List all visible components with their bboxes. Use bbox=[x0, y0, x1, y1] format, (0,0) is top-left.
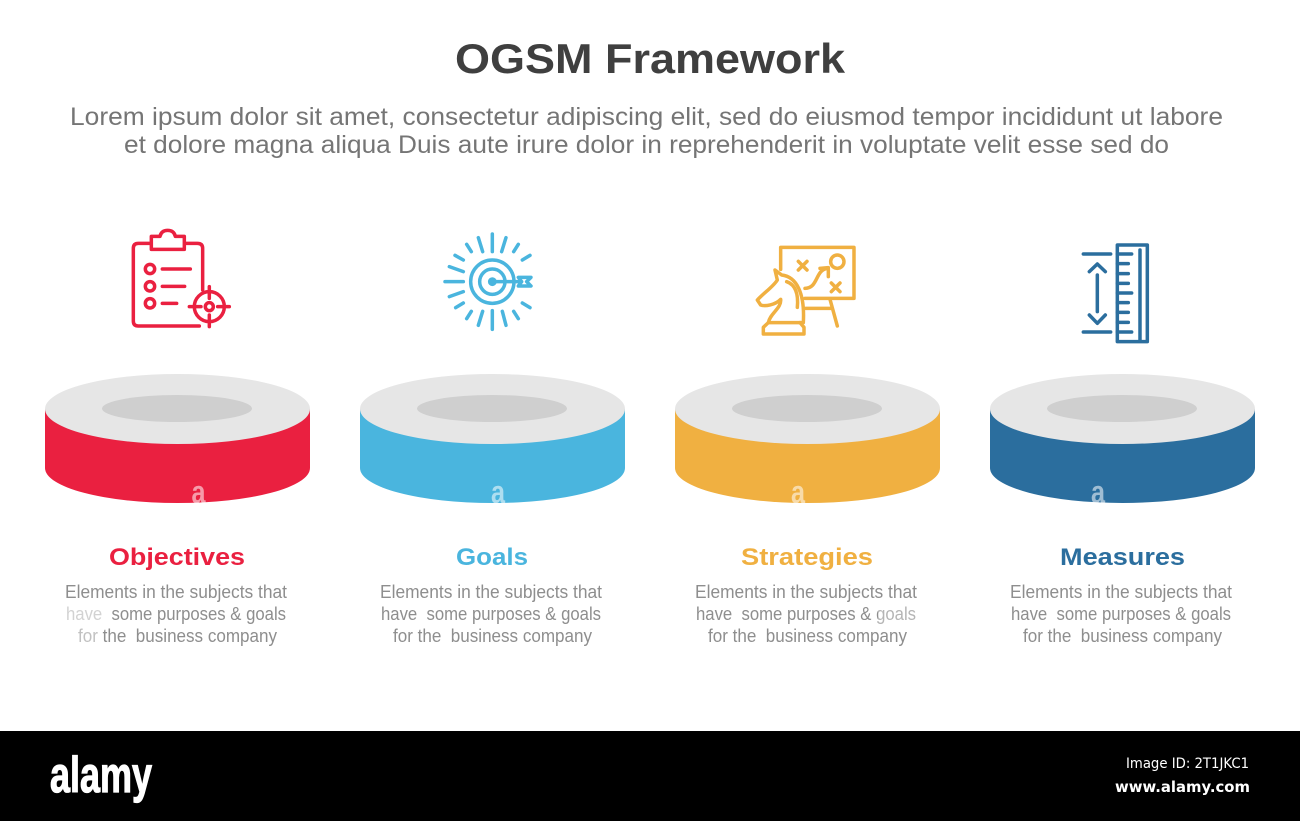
description: strategies bbox=[695, 582, 918, 646]
subtitle text block bbox=[70, 103, 1223, 159]
description: goals bbox=[380, 582, 602, 646]
panel: goals bbox=[360, 234, 625, 646]
description: strategies: have some purposes & goals bbox=[696, 604, 916, 624]
panel: objectives bbox=[45, 230, 310, 647]
cylinder: yellow: a bbox=[791, 474, 805, 510]
heading: measures: Measures bbox=[1060, 544, 1185, 571]
description: objectives: have some purposes & goals bbox=[66, 604, 286, 624]
description: goals: Elements in the subjects that bbox=[380, 582, 602, 602]
logo: alamy: alamy bbox=[50, 747, 152, 803]
website: www.alamy.com bbox=[1115, 778, 1250, 796]
icon: target with arrow and rays bbox=[445, 234, 531, 329]
cylinder: navy: a bbox=[1091, 474, 1105, 510]
description: measures bbox=[1010, 582, 1232, 646]
description: strategies: Elements in the subjects that bbox=[695, 582, 917, 602]
description: goals: for the business company bbox=[393, 626, 592, 646]
heading: objectives: Objectives bbox=[109, 544, 245, 571]
footer bar bbox=[0, 731, 1300, 821]
heading: goals: Goals bbox=[456, 544, 528, 571]
icon: chess knight and strategy board bbox=[757, 247, 854, 334]
cylinder: yellow bbox=[675, 374, 940, 510]
heading: strategies: Strategies bbox=[741, 544, 873, 571]
description: objectives bbox=[64, 582, 287, 647]
panel: measures bbox=[990, 245, 1255, 646]
description: measures: for the business company bbox=[1023, 626, 1222, 646]
cylinder: blue: a bbox=[491, 474, 505, 510]
cylinder: blue bbox=[360, 374, 625, 510]
panel: strategies bbox=[675, 247, 940, 646]
description: goals: have some purposes & goals bbox=[381, 604, 601, 624]
description: measures: have some purposes & goals bbox=[1011, 604, 1231, 624]
cylinder: red: a bbox=[192, 474, 206, 510]
cylinder: red bbox=[45, 374, 310, 510]
image id: Image ID: 2T1JKC1 bbox=[1126, 756, 1249, 772]
description: objectives: for the business company bbox=[78, 626, 277, 646]
description: objectives: Elements in the subjects that bbox=[65, 582, 287, 602]
subtitle text block: et dolore magna aliqua Duis aute irure dolor in reprehenderit in voluptate velit esse sed do bbox=[124, 131, 1169, 159]
title: OGSM Framework bbox=[455, 35, 846, 82]
cylinder: navy bbox=[990, 374, 1255, 510]
subtitle text block: Lorem ipsum dolor sit amet, consectetur adipiscing elit, sed do eiusmod tempor incididunt ut labore bbox=[70, 103, 1223, 131]
description: strategies: for the business company bbox=[708, 626, 907, 646]
icon: ruler with height arrow bbox=[1083, 245, 1147, 342]
icon: clipboard with target bbox=[133, 230, 229, 327]
description: measures: Elements in the subjects that bbox=[1010, 582, 1232, 602]
